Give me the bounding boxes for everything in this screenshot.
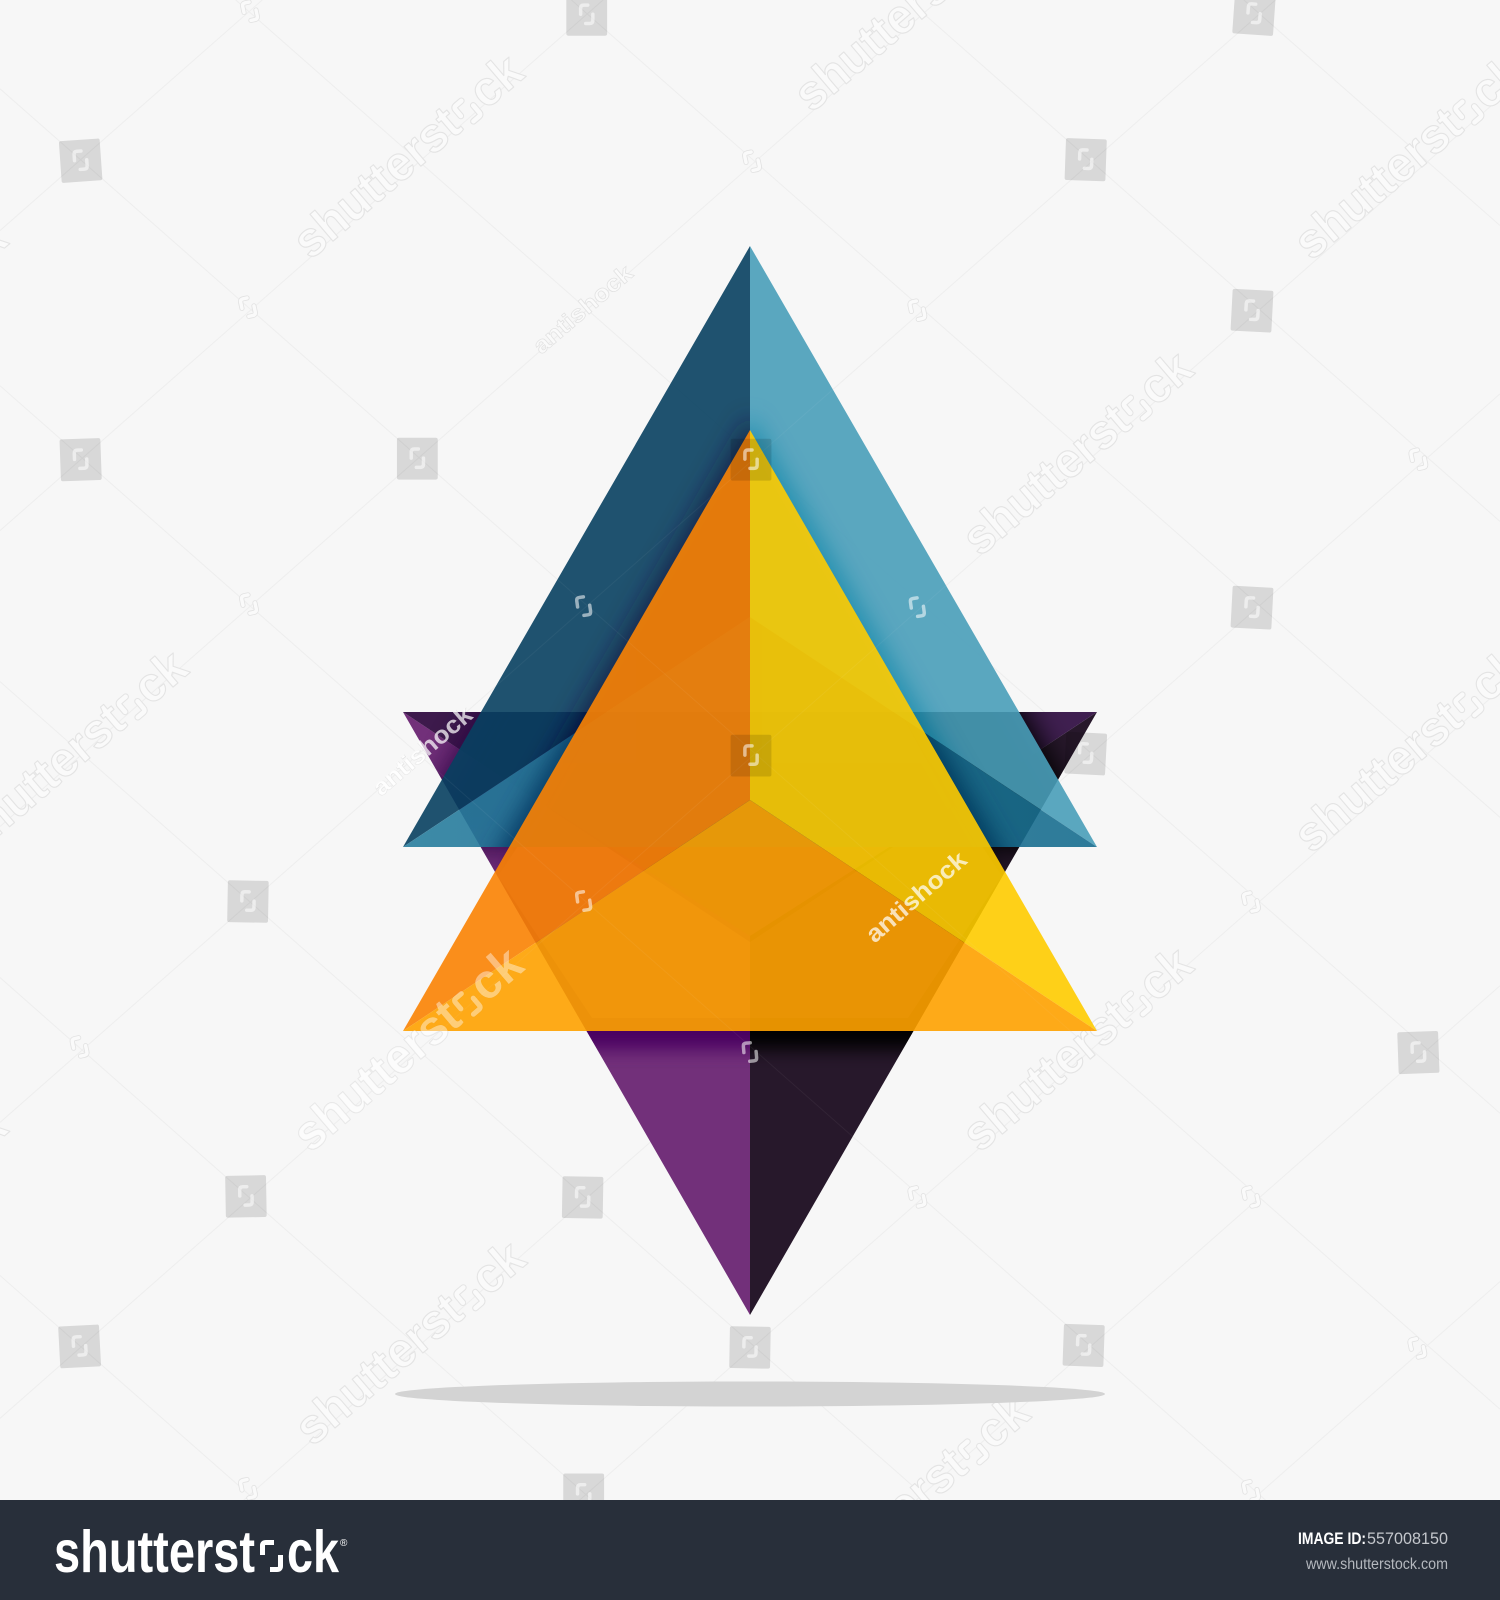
watermark text layer behind artwork: shutterstock <box>285 1230 536 1456</box>
footer logo: ck <box>287 1519 339 1585</box>
ground shadow <box>395 1382 1105 1406</box>
watermark text layer behind artwork: shutterstock <box>283 936 534 1162</box>
footer bar <box>0 1500 1500 1600</box>
watermark text layer behind artwork: shutterstock <box>952 340 1203 566</box>
watermark text layer behind artwork: antishock <box>367 701 478 801</box>
footer logo: o <box>258 1519 286 1585</box>
footer logo: shutterst <box>54 1519 255 1585</box>
purple inverted triangle <box>403 712 1097 1315</box>
registered mark: ® <box>340 1538 348 1549</box>
image id label: IMAGE ID: <box>1298 1530 1366 1548</box>
watermark text layer behind artwork: antishock <box>528 259 638 359</box>
watermark text layer behind artwork: shutterstock <box>283 43 534 269</box>
watermark text over artwork: antishock <box>367 701 478 801</box>
image id number: 557008150 <box>1367 1530 1448 1548</box>
watermark text over artwork <box>283 701 973 1162</box>
watermark text over artwork: shutterstock <box>283 936 534 1162</box>
watermark text over artwork: antishock <box>861 846 973 948</box>
website url: www.shutterstock.com <box>1305 1556 1448 1573</box>
watermark text layer behind artwork: shutterstock <box>952 936 1203 1162</box>
blue upper triangle <box>403 246 1097 847</box>
orange and yellow front triangle <box>403 430 1097 1031</box>
